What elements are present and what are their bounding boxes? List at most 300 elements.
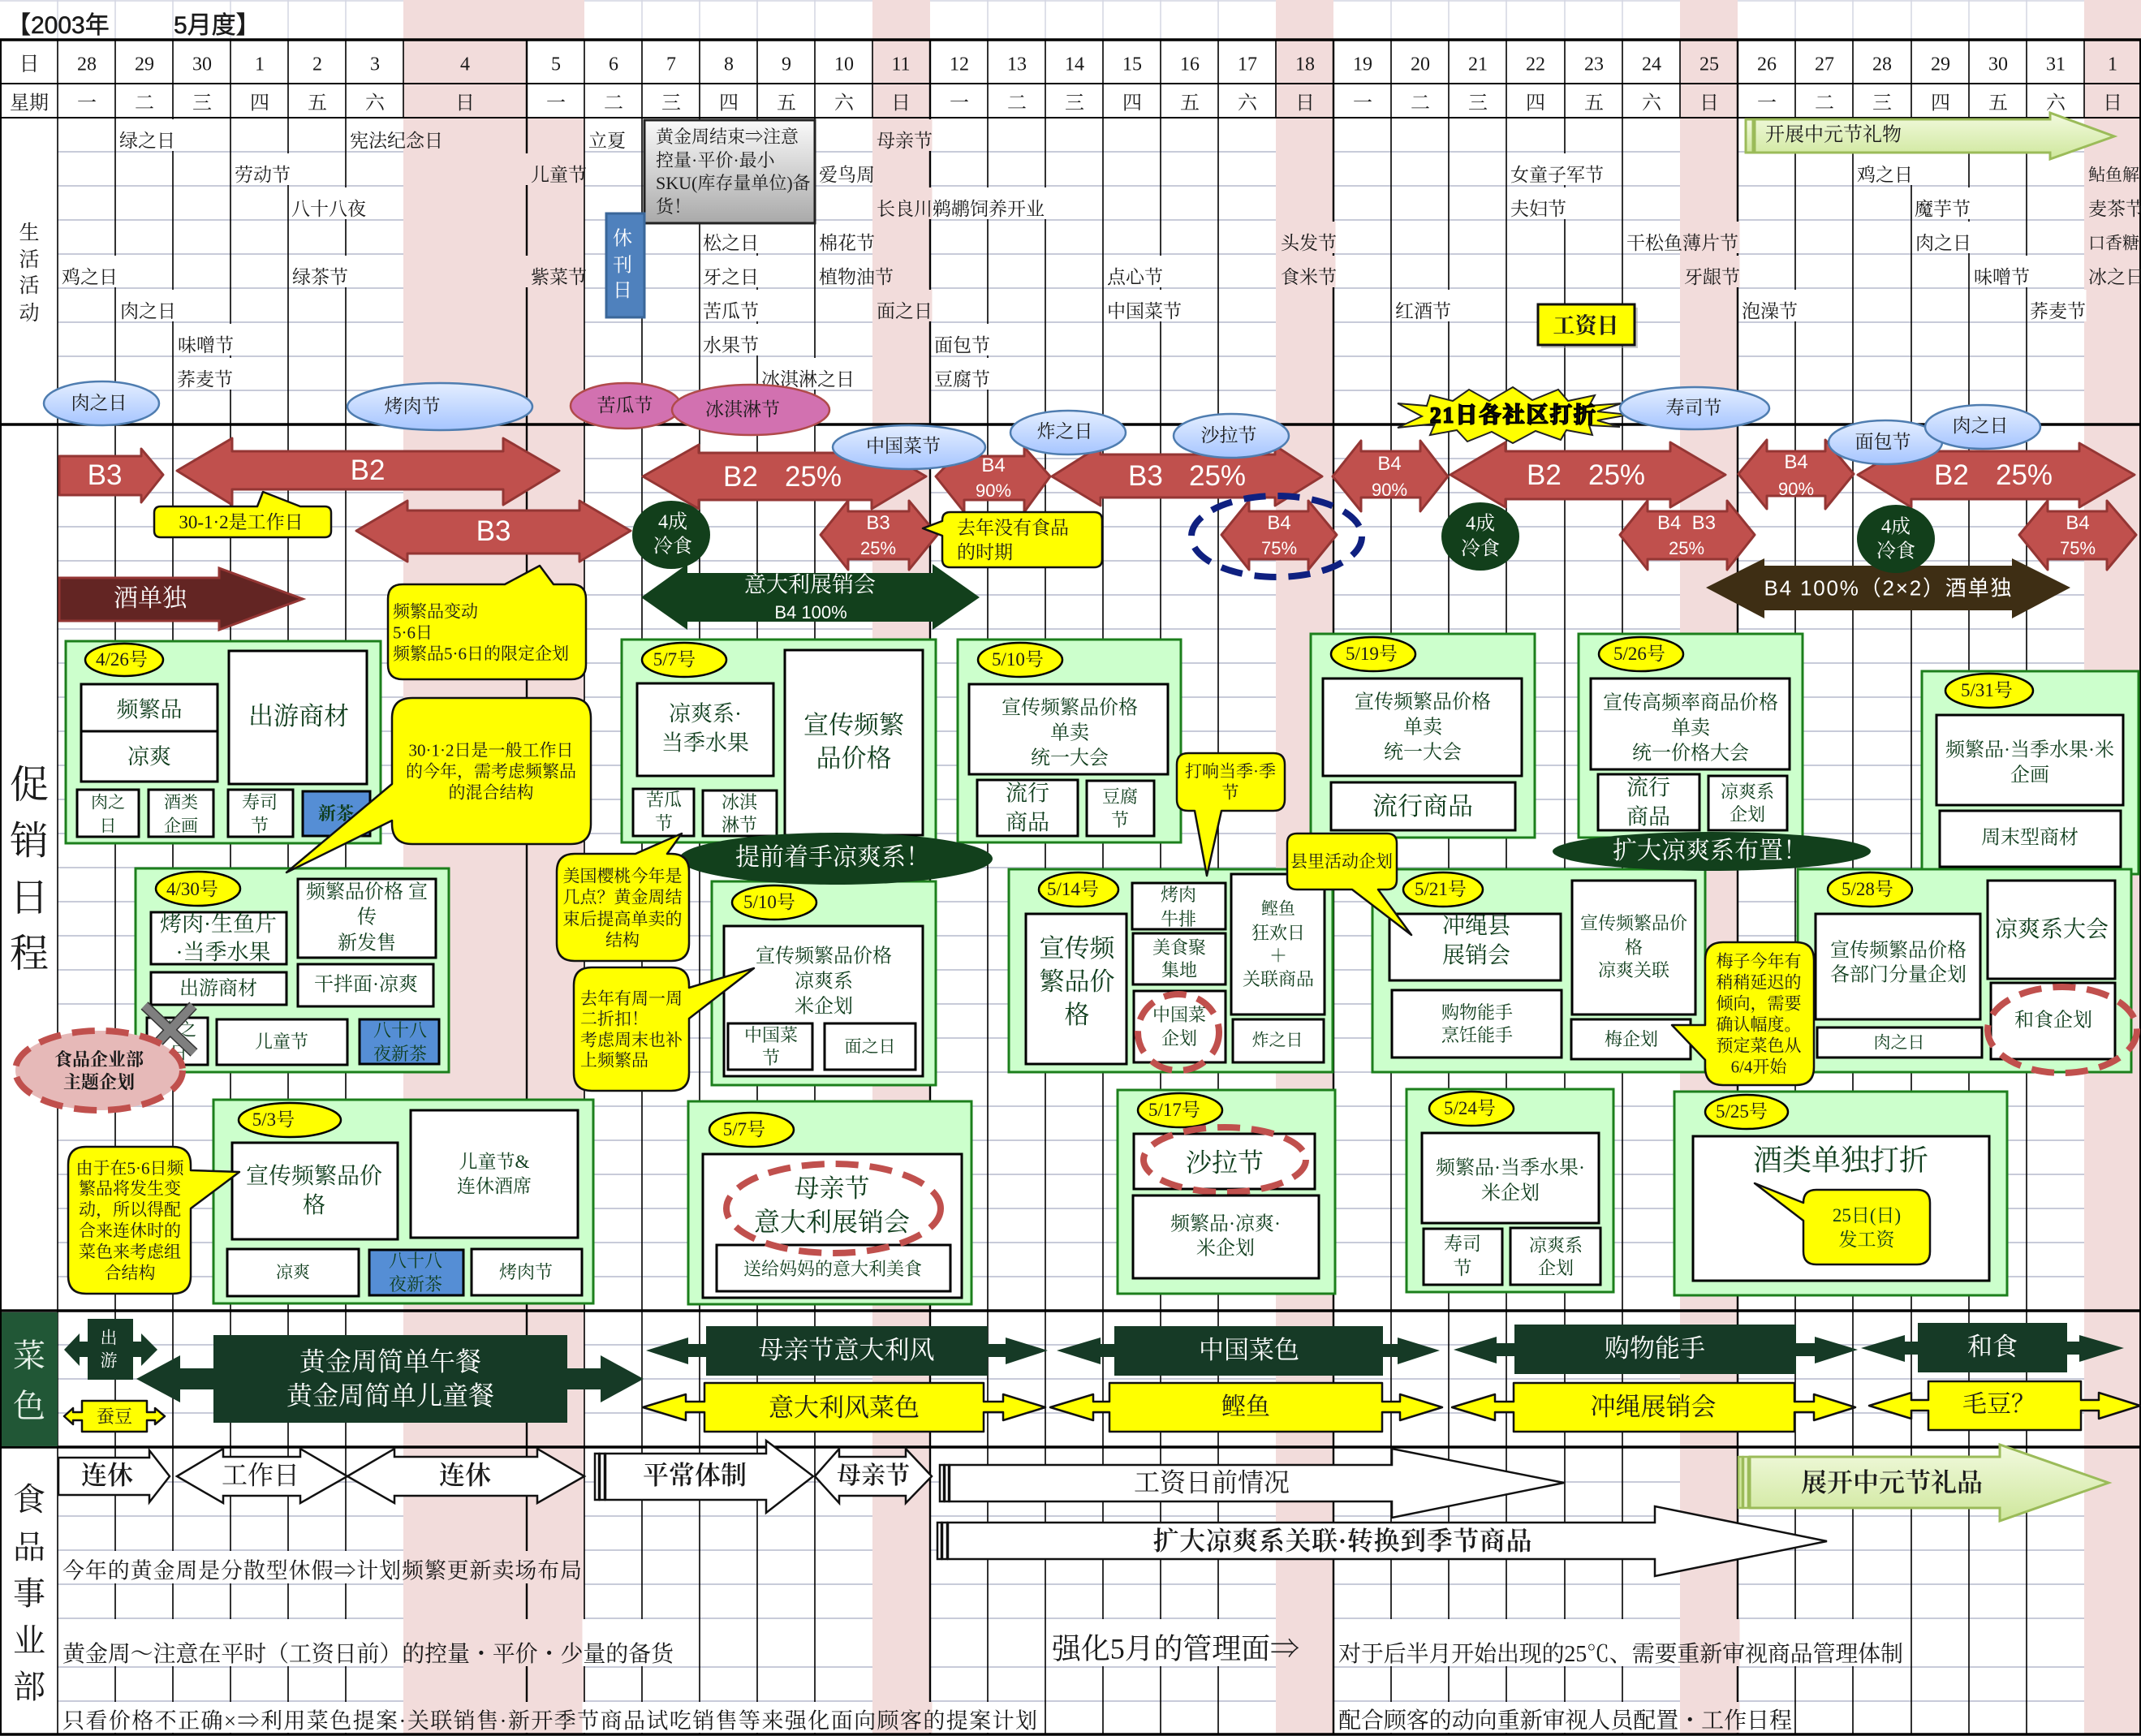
box: 流行商品 bbox=[977, 780, 1078, 836]
weekday header row: 三 bbox=[1468, 93, 1488, 114]
arrow: B4 B3 25%: 25% bbox=[1669, 538, 1704, 558]
date badge bbox=[1828, 872, 1912, 907]
date badge: 5/3号 bbox=[252, 1109, 295, 1130]
box: 中国菜节: 中国菜 bbox=[744, 1025, 798, 1045]
panel: 5/17 bbox=[1118, 1090, 1335, 1294]
box: 流行商品: 流行商品 bbox=[1372, 792, 1473, 821]
menu arrow: 中国菜色: 中国菜色 bbox=[1199, 1336, 1299, 1364]
life events calendar text: 冰淇淋之日 bbox=[761, 369, 855, 390]
panel: 4/30 bbox=[136, 868, 449, 1072]
weekday header row: 二 bbox=[1007, 93, 1027, 114]
box: 频繁品·当季水果·米企划: 米企划 bbox=[1481, 1182, 1540, 1204]
callout: golden week note: SKU(库存量单位)备 bbox=[656, 173, 811, 193]
arrow: B2 25% early May: B2 bbox=[723, 461, 758, 493]
box: 干拌面·凉爽: 干拌面·凉爽 bbox=[314, 974, 418, 995]
box: 宣传频繁品价格: 宣传频 bbox=[1039, 934, 1115, 963]
weekday header row: 二 bbox=[135, 93, 154, 114]
box: 冰淇淋节: 淋节 bbox=[722, 815, 757, 835]
box: 宣传频繁品价格: 格 bbox=[1065, 1001, 1089, 1029]
ellipse: 肉之日 late May: 肉之日 bbox=[1953, 416, 2008, 436]
callout: 30·1·2日是一般工作日: 的混合结构 bbox=[448, 782, 534, 802]
box: 沙拉节: 沙拉节 bbox=[1186, 1148, 1264, 1177]
arrow: 工作日: 工作日 bbox=[222, 1461, 299, 1490]
box: 鲣鱼狂欢日: 关联商品 bbox=[1243, 969, 1314, 989]
date header row: 27 bbox=[1815, 54, 1834, 75]
arrow: B4 100% 酒单独: B4 100%（2×2）酒单独 bbox=[1764, 576, 2011, 601]
life events calendar text: 面包节 bbox=[934, 335, 990, 355]
arrow: B3 25% bbox=[1052, 446, 1322, 506]
weekday header row bbox=[10, 93, 2122, 114]
arrow: 连休 second: 连休 bbox=[439, 1461, 491, 1490]
callout: 美国樱桃: 结构 bbox=[605, 930, 640, 950]
menu arrow: 母亲节意大利风: 母亲节意大利风 bbox=[758, 1336, 935, 1364]
arrow: 工资日前情况: 工资日前情况 bbox=[1134, 1467, 1290, 1497]
box: 频繁品价格宣传: 频繁品价格 宣 bbox=[306, 881, 428, 902]
box: 冲绳县展销会: 展销会 bbox=[1442, 942, 1510, 968]
box: 美食聚集地: 美食聚 bbox=[1152, 937, 1206, 958]
ellipse: 炸之日: 炸之日 bbox=[1037, 421, 1092, 442]
weekday header row: 日 bbox=[891, 93, 911, 114]
date header row: 8 bbox=[724, 54, 734, 75]
box: main: 宣传频繁品价格 bbox=[1355, 691, 1491, 713]
arrow: B4 90% third: B4 bbox=[1784, 451, 1808, 473]
date header row: 6 bbox=[609, 54, 618, 75]
callout: 30·1·2日是一般工作日: 30·1·2日是一般工作日 bbox=[409, 740, 573, 760]
arrow: 工作日 bbox=[177, 1449, 347, 1503]
box: 烤肉节 bbox=[472, 1249, 582, 1295]
box: 送给妈妈的意大利美食: 送给妈妈的意大利美食 bbox=[743, 1259, 922, 1279]
box: 冲绳县展销会 bbox=[1389, 913, 1561, 980]
box: 苦瓜节: 节 bbox=[655, 813, 673, 834]
box: 烤肉·生鱼片: 烤肉·生鱼片 bbox=[160, 912, 277, 937]
callout: 去年有周一周二折扣: 上频繁品 bbox=[580, 1050, 648, 1070]
text: 今年的黄金周: 今年的黄金周是分散型休假⇒计划频繁更新卖场布局 bbox=[62, 1558, 582, 1583]
box: 烤肉牛排: 烤肉 bbox=[1161, 885, 1196, 905]
box: 寿司节: 节 bbox=[251, 816, 269, 836]
arrow: B3 25% small bbox=[821, 501, 937, 570]
box: 流行商品: 商品 bbox=[1006, 810, 1049, 834]
box: main: 统一大会 bbox=[1384, 742, 1462, 763]
ellipse: 冰淇淋节: 冰淇淋节 bbox=[705, 399, 780, 420]
date header row: 3 bbox=[370, 54, 380, 75]
box: 中国菜节 bbox=[728, 1023, 812, 1070]
box: 凉爽系企划: 凉爽系 bbox=[1529, 1235, 1583, 1256]
box: main bbox=[724, 926, 923, 1076]
arrow: 开展中元节礼物 bbox=[1746, 113, 2114, 159]
weekday header row: 五 bbox=[1584, 93, 1604, 114]
panel: 5/10 second bbox=[712, 881, 936, 1085]
callout: 由于在5·6日 bbox=[68, 1147, 239, 1294]
box: 干拌面·凉爽 bbox=[298, 964, 433, 1006]
date badge bbox=[1599, 637, 1683, 671]
callout: 美国樱桃: 几点？黄金周结 bbox=[563, 888, 682, 907]
life events calendar text: 红酒节 bbox=[1395, 301, 1451, 321]
life events calendar text: 儿童节 bbox=[531, 165, 587, 185]
box: 沙拉节 bbox=[1134, 1134, 1315, 1189]
callout: 频繁品变动: 5·6日 bbox=[393, 623, 433, 643]
box: 中国菜企划 bbox=[1134, 991, 1226, 1062]
date header row: 28 bbox=[1872, 54, 1892, 75]
life events calendar text: 长良川鹈鹕饲养开业 bbox=[877, 199, 1045, 219]
arrow: B4 B3 25% bbox=[1620, 501, 1755, 570]
box: 宣传频繁品价格 bbox=[1026, 914, 1127, 1064]
starburst: 21日各社区打折: 21日各社区打折 bbox=[1430, 403, 1596, 427]
section label: 促销日程: 日 bbox=[10, 877, 49, 920]
arrow: 工资日前情况 bbox=[940, 1449, 1564, 1518]
weekday header row: 五 bbox=[308, 93, 327, 114]
date badge bbox=[732, 885, 816, 920]
box: 凉爽系·当季水果: 凉爽系· bbox=[669, 701, 742, 726]
panel: 4/26 bbox=[66, 641, 381, 843]
box: 频繁品·当季水果·米企画: 企画 bbox=[2010, 765, 2049, 786]
box: 寿司节: 寿司 bbox=[242, 792, 278, 812]
box: 酒类企画: 企画 bbox=[164, 816, 198, 836]
date badge: 5/7号 bbox=[653, 649, 696, 670]
box: 凉爽系企划: 企划 bbox=[1538, 1258, 1574, 1278]
date header row: 2 bbox=[312, 54, 322, 75]
box: 美食聚集地: 集地 bbox=[1161, 960, 1197, 980]
date header row: 12 bbox=[950, 54, 969, 75]
section label: 促销日程: 促 bbox=[10, 764, 49, 807]
callout: 由于在5·6日: 由于在5·6日频 bbox=[76, 1159, 184, 1178]
box: 新茶: 新茶 bbox=[318, 803, 354, 824]
life events calendar text: 牙龈节 bbox=[1684, 267, 1740, 287]
menu arrow: 购物能手: 购物能手 bbox=[1605, 1334, 1705, 1363]
weekday header row: 四 bbox=[1526, 93, 1545, 114]
label: 工资日: 工资日 bbox=[1553, 313, 1618, 338]
callout: golden week note: 货！ bbox=[656, 196, 691, 217]
menu arrow: 和食 bbox=[1861, 1323, 2124, 1372]
banner: 提前着手凉爽系: 提前着手凉爽系！ bbox=[735, 844, 930, 871]
box: 苦瓜节 bbox=[633, 789, 694, 836]
box: 周末型商材: 周末型商材 bbox=[1981, 826, 2079, 849]
box: 宣传频繁品价格 凉爽关联: 宣传频繁品价 bbox=[1580, 913, 1687, 933]
box: 苦瓜节: 苦瓜 bbox=[646, 790, 682, 810]
date header row: 16 bbox=[1180, 54, 1200, 75]
panel: 5/14 bbox=[1009, 869, 1333, 1072]
arrow: B3 25%: 25% bbox=[1189, 460, 1246, 492]
box: main bbox=[1591, 678, 1790, 769]
date header row: 日 bbox=[19, 54, 40, 75]
menu arrow: 黄金周简单午餐: 黄金周简单儿童餐 bbox=[286, 1381, 494, 1411]
box: 凉爽: 凉爽 bbox=[276, 1263, 310, 1282]
box: 流行商品: 流行 bbox=[1626, 776, 1670, 800]
date badge: 5/26号 bbox=[1613, 644, 1665, 664]
date header row: 25 bbox=[1699, 54, 1719, 75]
ellipse: 肉之日 bbox=[44, 381, 159, 425]
box: 肉之日: 肉之日 bbox=[1873, 1032, 1925, 1052]
callout: 去年有周一周二折扣: 去年有周一周 bbox=[580, 989, 683, 1008]
life events calendar text: 牙之日 bbox=[703, 267, 759, 287]
arrow: B3: B3 bbox=[88, 459, 122, 491]
menu arrow: 毛豆？: 毛豆？ bbox=[1962, 1391, 2035, 1418]
section label: 食品事业部: 事 bbox=[13, 1575, 45, 1612]
ellipse: 中国菜节 bbox=[833, 425, 985, 469]
box: 和食企划: 和食企划 bbox=[2014, 1010, 2092, 1031]
weekday header row: 日 bbox=[455, 93, 475, 114]
box: 八十八夜新茶: 夜新茶 bbox=[373, 1044, 427, 1064]
box: 儿童节&连休酒席: 儿童节& bbox=[459, 1152, 530, 1172]
callout: 频繁品变动: 频繁品变动 bbox=[393, 602, 478, 622]
life events calendar text: 八十八夜 bbox=[291, 199, 366, 219]
badge: 4成冷食 2 bbox=[1441, 502, 1519, 571]
box: 宣传频繁品价格 凉爽关联 bbox=[1572, 881, 1695, 1014]
section label: 促销日程: 销 bbox=[10, 820, 49, 863]
arrow: B2 25% late May bbox=[1858, 443, 2135, 507]
text: 配合顾客: 配合顾客的动向重新审视人员配置・工作日程 bbox=[1338, 1708, 1792, 1734]
arrow: 连休: 连休 bbox=[81, 1461, 133, 1490]
date header row: 29 bbox=[135, 54, 154, 75]
box: 寿司节: 节 bbox=[1453, 1258, 1472, 1278]
box: 频繁品·凉爽·米企划: 频繁品·凉爽· bbox=[1170, 1213, 1281, 1235]
arrow: B4 90%: B4 bbox=[981, 454, 1006, 476]
weekday header row: 一 bbox=[546, 93, 566, 114]
weekday header row: 三 bbox=[1872, 93, 1892, 114]
arrow: B4 90%: 90% bbox=[976, 480, 1011, 501]
badge: 4成冷食 3: 冷食 bbox=[1876, 541, 1915, 562]
life events calendar text: 女童子军节 bbox=[1510, 165, 1604, 185]
box: 宣传频繁品价格 凉爽关联: 凉爽关联 bbox=[1598, 960, 1669, 980]
weekday header row: 日 bbox=[1699, 93, 1719, 114]
box: main bbox=[1323, 678, 1522, 776]
box: 酒类单独打折 bbox=[1693, 1136, 1989, 1281]
section label: 生活活动: 生 bbox=[19, 222, 40, 244]
arrow: 意大利展销会: 意大利展销会 bbox=[744, 573, 876, 597]
box: 八十八夜新茶 bbox=[369, 1250, 463, 1295]
arrow: 开展中元节礼物: 开展中元节礼物 bbox=[1765, 123, 1902, 146]
box: 凉爽系·当季水果 bbox=[637, 683, 773, 776]
box: 寿司节 bbox=[1424, 1229, 1502, 1285]
box: 频繁品价格宣传 bbox=[298, 879, 436, 958]
weekday header row: 六 bbox=[365, 93, 386, 114]
box: 寿司节: 寿司 bbox=[1444, 1234, 1481, 1254]
box: 送给妈妈的意大利美食 bbox=[717, 1245, 950, 1291]
menu arrow: 冲绳展销会: 冲绳展销会 bbox=[1591, 1393, 1716, 1421]
box: 频繁品·当季水果·米企画 bbox=[1936, 715, 2123, 805]
ellipse: 肉之日: 肉之日 bbox=[71, 393, 127, 413]
callout: 由于在5·6日: 菜色来考虑组 bbox=[79, 1242, 181, 1261]
date badge: 5/10号 bbox=[992, 649, 1044, 670]
box: 新茶 bbox=[303, 791, 370, 836]
box: 频繁品·当季水果·米企划 bbox=[1422, 1133, 1599, 1223]
box: main: 单卖 bbox=[1671, 717, 1710, 739]
date header row: 31 bbox=[2046, 54, 2066, 75]
box: 母亲节意大利展销会: 意大利展销会 bbox=[754, 1208, 910, 1237]
box: 冰淇淋节 bbox=[703, 790, 777, 836]
callout: 梅子今年: 确认幅度。 bbox=[1716, 1014, 1802, 1034]
date badge: 4/30号 bbox=[166, 879, 218, 899]
weekday header row: 四 bbox=[1931, 93, 1950, 114]
box: main: 宣传频繁品价格 bbox=[1002, 696, 1138, 719]
date header row: 1 bbox=[2108, 54, 2117, 75]
box: 肉之日 crossed out: 肉之 bbox=[161, 1019, 196, 1040]
weekday header row: 四 bbox=[1122, 93, 1142, 114]
life events calendar text: 劳动节 bbox=[235, 165, 291, 185]
box: 频繁品价格宣传: 新发售 bbox=[338, 932, 396, 954]
box: 豆腐节: 节 bbox=[1111, 810, 1129, 830]
callout: 美国樱桃: 束后提高单卖的 bbox=[563, 909, 682, 928]
arrow: B4 75% second: 75% bbox=[2060, 538, 2096, 558]
arrow: 意大利展销会: B4 100% bbox=[774, 602, 847, 622]
life events calendar text: 鸡之日 bbox=[62, 267, 118, 287]
weekday header row: 五 bbox=[777, 93, 796, 114]
ellipse: 食品企业部主题企划: 主题企划 bbox=[63, 1072, 135, 1092]
box: main: 米企划 bbox=[795, 995, 853, 1018]
arrow: 平常体制 bbox=[595, 1441, 813, 1513]
callout: 25日发工资: 25日(日) bbox=[1833, 1205, 1901, 1226]
date badge: 4/26号 bbox=[96, 649, 148, 670]
life events calendar text: 荞麦节 bbox=[2030, 301, 2086, 321]
box: 凉爽系大会: 凉爽系大会 bbox=[1995, 916, 2109, 942]
menu arrow: 蚕豆: 蚕豆 bbox=[97, 1406, 132, 1427]
box: 宣传频繁品价格: 品价格 bbox=[816, 744, 891, 773]
date badge: 5/31号 bbox=[1961, 680, 2013, 700]
box: 流行商品 bbox=[1331, 782, 1515, 830]
banner: 扩大凉爽系布置: 扩大凉爽系布置！ bbox=[1613, 838, 1807, 864]
panel: 5/28 bbox=[1798, 869, 2137, 1073]
callout: 县里活动企划: 县里活动企划 bbox=[1290, 852, 1393, 872]
weekday header row: 四 bbox=[250, 93, 269, 114]
life events calendar text: 紫菜节 bbox=[531, 267, 587, 287]
box: 肉之日 crossed out: 日 bbox=[170, 1043, 187, 1063]
menu arrow: 鲣鱼 bbox=[1050, 1383, 1442, 1432]
date header row: 5 bbox=[551, 54, 561, 75]
date header row: 15 bbox=[1122, 54, 1142, 75]
box: 冲绳县展销会: 冲绳县 bbox=[1442, 913, 1510, 939]
life events calendar text: 点心节 bbox=[1107, 267, 1163, 287]
box: 烤肉节: 烤肉节 bbox=[499, 1262, 553, 1282]
date badge bbox=[156, 872, 240, 906]
arrow: B4 90% second: 90% bbox=[1372, 480, 1407, 500]
life events calendar text bbox=[62, 131, 2141, 390]
date badge: 5/24号 bbox=[1444, 1098, 1496, 1118]
arrow: 意大利展销会 bbox=[641, 564, 980, 630]
box: 鲣鱼狂欢日 bbox=[1231, 874, 1325, 1014]
date badge bbox=[85, 644, 163, 676]
callout: 美国樱桃: 美国樱桃今年是 bbox=[563, 867, 682, 886]
label: 休刊日: 刊 bbox=[613, 255, 632, 276]
date header row: 21 bbox=[1468, 54, 1488, 75]
date header row: 13 bbox=[1007, 54, 1027, 75]
date header row bbox=[19, 54, 2117, 75]
callout: 梅子今年: 预定菜色从 bbox=[1716, 1036, 1802, 1055]
callout: 县里活动企划 bbox=[1287, 834, 1411, 935]
box: 凉爽系·当季水果: 当季水果 bbox=[661, 730, 749, 755]
date header row: 30 bbox=[1988, 54, 2008, 75]
box: 流行商品: 流行 bbox=[1006, 781, 1049, 805]
section label: 食品事业部: 品 bbox=[13, 1529, 45, 1566]
life events calendar text: 肉之日 bbox=[120, 301, 176, 321]
date badge bbox=[1039, 872, 1118, 907]
box: 宣传频繁品价格 bbox=[1816, 914, 1980, 1019]
starburst: 21日各社区打折 bbox=[1398, 387, 1629, 443]
date header row: 22 bbox=[1526, 54, 1545, 75]
menu arrow: 冲绳展销会 bbox=[1452, 1383, 1855, 1432]
box: 鲣鱼狂欢日: ＋ bbox=[1269, 946, 1287, 966]
badge: 4成冷食 2: 冷食 bbox=[1461, 537, 1500, 560]
callout: 梅子今年: 稍稍延迟的 bbox=[1716, 972, 1802, 992]
arrow: B3 second: B3 bbox=[476, 515, 510, 547]
section label: 生活活动 bbox=[19, 222, 40, 325]
label: 工资日 bbox=[1538, 304, 1638, 348]
panel: 5/25 bbox=[1674, 1092, 2007, 1295]
date badge bbox=[1138, 1093, 1222, 1127]
dashed highlight bbox=[1988, 987, 2137, 1073]
callout: 去年没有食品的时期: 去年没有食品 bbox=[957, 518, 1069, 538]
weekday header row: 一 bbox=[77, 93, 97, 114]
arrow: 展开中元节礼品: 展开中元节礼品 bbox=[1801, 1467, 1983, 1497]
date header row: 24 bbox=[1642, 54, 1661, 75]
date header row: 20 bbox=[1411, 54, 1430, 75]
box: 烤肉·生鱼片: ·当季水果 bbox=[175, 940, 271, 964]
box: 中国菜企划: 中国菜 bbox=[1152, 1005, 1206, 1025]
ellipse: 炸之日 bbox=[1010, 411, 1126, 454]
box: 肉之日 bbox=[77, 790, 139, 837]
box: 八十八夜新茶 bbox=[360, 1019, 439, 1064]
arrow: B4 90% third bbox=[1738, 440, 1854, 509]
box: 购物能手: 烹饪能手 bbox=[1441, 1025, 1513, 1045]
life events calendar text: 魔芋节 bbox=[1915, 199, 1971, 219]
box: 宣传频繁品价格: 宣传频繁 bbox=[803, 711, 904, 739]
box: 八十八夜新茶: 八十八 bbox=[373, 1020, 427, 1040]
box: 凉爽 bbox=[227, 1249, 359, 1296]
box: 肉之日: 肉之 bbox=[91, 792, 125, 812]
arrow: B4 75% bbox=[1221, 501, 1337, 570]
box: 酒类单独打折: 酒类单独打折 bbox=[1753, 1144, 1928, 1177]
box: main bbox=[969, 684, 1168, 774]
box: 母亲节意大利展销会: 母亲节 bbox=[794, 1174, 870, 1203]
section label: 菜色: 菜 bbox=[13, 1338, 45, 1374]
callout: 去年没有食品的时期: 的时期 bbox=[957, 542, 1013, 562]
box: 八十八夜新茶: 夜新茶 bbox=[389, 1274, 442, 1294]
ellipse: 烤肉节: 烤肉节 bbox=[385, 396, 440, 416]
life events calendar text: 宪法纪念日 bbox=[350, 131, 443, 151]
box: 中国菜节: 节 bbox=[762, 1048, 780, 1068]
menu arrow: 母亲节意大利风 bbox=[646, 1326, 1048, 1376]
ellipse: 面包节 bbox=[1829, 420, 1942, 464]
box: 频繁品·当季水果·米企划: 频繁品·当季水果· bbox=[1436, 1157, 1585, 1178]
box: 炸之日: 炸之日 bbox=[1251, 1031, 1303, 1050]
box: 流行商品: 商品 bbox=[1626, 805, 1670, 829]
box: 周末型商材 bbox=[1940, 811, 2121, 867]
dashed highlight bbox=[1144, 1127, 1306, 1192]
date badge bbox=[1705, 1095, 1788, 1129]
label: 休刊日 bbox=[606, 213, 644, 317]
box: 梅企划 bbox=[1571, 1019, 1691, 1059]
weekday header row: 三 bbox=[661, 93, 681, 114]
box: 烤肉牛排 bbox=[1132, 883, 1226, 929]
date badge bbox=[709, 1113, 794, 1147]
date badge: 5/21号 bbox=[1415, 879, 1467, 899]
ellipse: 寿司节 bbox=[1620, 387, 1769, 429]
section label: 菜色: 色 bbox=[13, 1388, 45, 1424]
box: 宣传频繁品价格: 各部门分量企划 bbox=[1830, 964, 1967, 985]
callout: 去年有周一周二折扣: 考虑周末也补 bbox=[580, 1031, 683, 1050]
arrow: 扩大凉爽系关联·转换到季节商品: 扩大凉爽系关联·转换到季节商品 bbox=[1152, 1526, 1532, 1555]
menu arrow: 意大利风菜色 bbox=[643, 1383, 1045, 1432]
date header row: 29 bbox=[1931, 54, 1950, 75]
date badge bbox=[1945, 674, 2033, 708]
arrow: 展开中元节礼品 bbox=[1738, 1445, 2109, 1521]
box: 儿童节 bbox=[217, 1019, 347, 1065]
banner: 扩大凉爽系布置 bbox=[1553, 832, 1871, 871]
date header row: 28 bbox=[77, 54, 97, 75]
box: 冰淇淋节: 冰淇 bbox=[722, 792, 757, 812]
arrow: B4 75%: 75% bbox=[1261, 538, 1297, 558]
badge: 4成冷食 1: 冷食 bbox=[653, 536, 692, 557]
box: 儿童节: 儿童节 bbox=[255, 1032, 308, 1052]
section label: 生活活动: 活 bbox=[19, 248, 40, 271]
